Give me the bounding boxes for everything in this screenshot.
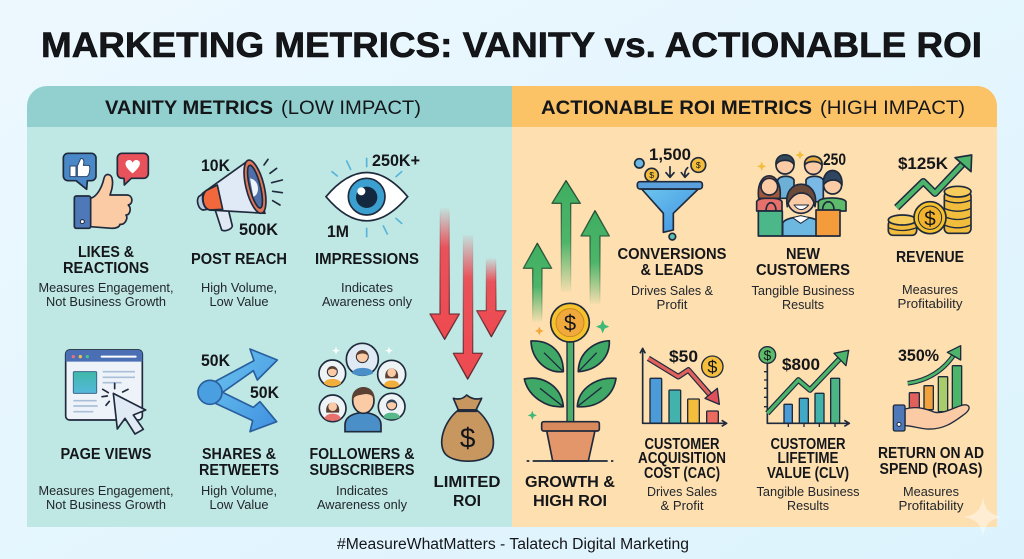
description: Awareness only xyxy=(317,497,407,512)
heading: COST (CAC) xyxy=(644,465,720,482)
description: & Profit xyxy=(660,498,704,513)
heading: IMPRESSIONS xyxy=(315,251,419,268)
heading: VALUE (CLV) xyxy=(767,465,849,482)
icon: plant with coin: $ xyxy=(564,311,576,336)
icon: eye xyxy=(326,158,408,237)
card: customer lifetime value xyxy=(756,347,860,513)
icon: falling bar chart xyxy=(640,348,727,426)
description: Profitability xyxy=(898,296,963,311)
icon: coins with rising arrow xyxy=(888,155,972,235)
description xyxy=(752,283,855,312)
description xyxy=(38,483,174,512)
value: 1M: 1M xyxy=(327,223,349,241)
heading: NEW xyxy=(786,246,821,263)
value: $50: $50 xyxy=(669,348,698,366)
description: Profitability xyxy=(898,498,964,513)
heading: POST REACH xyxy=(191,251,287,268)
description: Drives Sales & xyxy=(631,283,713,298)
callout: limited ROI xyxy=(434,395,500,510)
description: Drives Sales xyxy=(647,484,717,499)
heading: vanity metrics: (LOW IMPACT) xyxy=(281,97,421,119)
heading xyxy=(756,246,850,279)
arrows: red falling arrows xyxy=(430,208,506,379)
card: likes and reactions xyxy=(38,153,174,309)
description: Results xyxy=(782,297,824,312)
description: Indicates xyxy=(336,483,388,498)
heading: vanity metrics: VANITY METRICS xyxy=(105,97,273,119)
heading: RETURN ON AD xyxy=(878,445,984,462)
heading xyxy=(310,446,415,479)
description: Tangible Business xyxy=(756,484,860,499)
icon: plant with coin xyxy=(524,303,616,461)
heading: SUBSCRIBERS xyxy=(310,462,415,479)
card: followers and subscribers xyxy=(310,343,415,512)
value: $800: $800 xyxy=(782,356,820,374)
card: new customers xyxy=(752,151,855,312)
description: Measures xyxy=(902,282,958,297)
description xyxy=(631,283,713,312)
icon: happy customers with shopping bags xyxy=(757,151,846,236)
icon: money bag: $ xyxy=(460,423,476,454)
heading: CONVERSIONS xyxy=(618,246,727,263)
heading xyxy=(63,244,149,277)
icon: falling bar chart: $ xyxy=(707,357,717,377)
description: Profit xyxy=(656,297,688,312)
description: Measures Engagement, xyxy=(38,280,174,295)
value: 250: 250 xyxy=(823,151,846,169)
description: High Volume, xyxy=(201,483,277,498)
description: Low Value xyxy=(210,497,268,512)
label xyxy=(525,474,615,510)
callout: growth and high ROI xyxy=(524,303,616,510)
card: return on ad spend xyxy=(878,346,984,513)
icon: group of people xyxy=(319,343,406,432)
value: 1,500: 1,500 xyxy=(649,146,691,164)
label: GROWTH & xyxy=(525,474,615,491)
heading xyxy=(878,445,984,478)
icon: rising bar chart: $ xyxy=(763,347,771,363)
card: page views xyxy=(38,350,174,512)
heading: PAGE VIEWS xyxy=(60,446,152,463)
heading xyxy=(638,436,726,482)
value: 10K: 10K xyxy=(201,157,230,175)
heading: CUSTOMER xyxy=(644,436,720,453)
description: Tangible Business xyxy=(752,283,855,298)
description xyxy=(201,483,277,512)
description: Measures xyxy=(903,484,959,499)
card: customer acquisition cost xyxy=(638,348,727,513)
heading xyxy=(767,436,849,482)
heading: ACQUISITION xyxy=(638,450,726,467)
icon: megaphone xyxy=(198,158,282,231)
icon: sparkle watermark xyxy=(963,497,1003,537)
icon: hand holding bar chart xyxy=(893,346,969,431)
heading: RETWEETS xyxy=(199,462,279,479)
value: 500K: 500K xyxy=(239,221,278,239)
heading: & LEADS xyxy=(640,262,704,279)
heading xyxy=(199,446,279,479)
value: 350%: 350% xyxy=(898,347,939,365)
heading: REACTIONS xyxy=(63,260,149,277)
card: revenue xyxy=(888,155,972,311)
description: Not Business Growth xyxy=(46,294,166,309)
heading: CUSTOMER xyxy=(770,436,846,453)
card: conversions and leads xyxy=(618,146,727,312)
icon: funnel with coins xyxy=(635,158,706,240)
value: 50K top: 50K xyxy=(201,352,230,370)
card: post reach xyxy=(191,157,287,309)
heading: vanity metrics xyxy=(105,97,421,119)
heading: FOLLOWERS & xyxy=(310,446,415,463)
arrows: green rising arrows xyxy=(523,181,609,322)
icon: coins with rising arrow: $ xyxy=(924,207,936,230)
description xyxy=(898,282,963,311)
heading xyxy=(618,246,727,279)
icon: browser window and cursor xyxy=(66,350,146,434)
icon: funnel with coins: $ xyxy=(696,160,701,170)
description: Indicates xyxy=(341,280,393,295)
description xyxy=(317,483,407,512)
card: impressions xyxy=(315,152,420,309)
icon: rising bar chart xyxy=(759,347,849,427)
icon: share arrows xyxy=(198,349,277,432)
description: Low Value xyxy=(210,294,268,309)
label: LIMITED xyxy=(434,474,500,491)
description xyxy=(756,484,860,513)
description xyxy=(647,484,717,513)
description: Not Business Growth xyxy=(46,497,166,512)
label: ROI xyxy=(453,493,481,510)
title: MARKETING METRICS: VANITY vs. ACTIONABLE ROI xyxy=(41,26,982,65)
description: High Volume, xyxy=(201,280,277,295)
label xyxy=(434,474,500,510)
description xyxy=(322,280,412,309)
panel: vanity metrics background xyxy=(27,86,512,527)
icon: thumbs up and heart xyxy=(63,153,148,228)
card: shares and retweets xyxy=(198,349,279,512)
footer hashtag: #MeasureWhatMatters - Talatech Digital Marketing xyxy=(337,536,689,553)
panel: actionable ROI metrics background xyxy=(512,86,997,527)
heading: actionable ROI metrics xyxy=(541,97,965,119)
heading: SHARES & xyxy=(202,446,276,463)
heading: CUSTOMERS xyxy=(756,262,850,279)
heading: SPEND (ROAS) xyxy=(880,461,982,478)
description: Results xyxy=(787,498,829,513)
description xyxy=(898,484,964,513)
heading: actionable ROI metrics: (HIGH IMPACT) xyxy=(820,97,965,119)
label: HIGH ROI xyxy=(533,493,607,510)
description xyxy=(38,280,174,309)
description: Awareness only xyxy=(322,294,412,309)
description: Measures Engagement, xyxy=(38,483,174,498)
heading: actionable ROI metrics: ACTIONABLE ROI METRICS xyxy=(541,97,812,119)
heading: REVENUE xyxy=(896,249,964,266)
description xyxy=(201,280,277,309)
heading: LIKES & xyxy=(78,244,134,261)
value: $125K: $125K xyxy=(898,155,948,173)
heading: LIFETIME xyxy=(778,450,839,467)
value: 50K bottom: 50K xyxy=(250,384,279,402)
icon: funnel with coins: $ xyxy=(649,170,654,180)
value: 250K+: 250K+ xyxy=(372,152,420,170)
